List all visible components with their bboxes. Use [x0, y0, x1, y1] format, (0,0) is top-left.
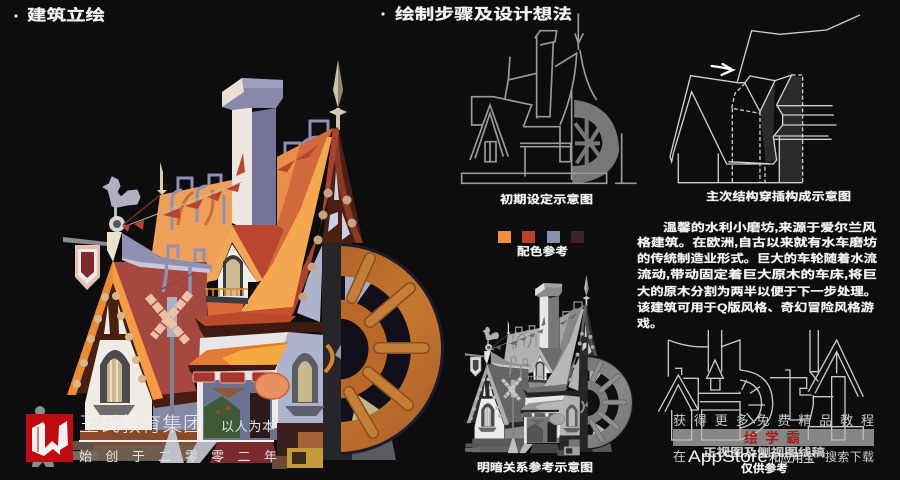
watermark: app promo [673, 413, 874, 466]
small spire [157, 162, 167, 195]
dark block beside the wheel [322, 243, 352, 460]
gear arm [325, 325, 358, 372]
rafter ledge [195, 318, 325, 338]
motto: 以人为本 [221, 419, 275, 434]
watermark: app promo: 和应用宝 [769, 450, 815, 465]
logo: red square [26, 414, 73, 462]
caption: colour reference: 配色参考 [517, 244, 568, 258]
windmill blades [148, 293, 190, 342]
hanging banner [63, 237, 107, 290]
water wheel [232, 243, 444, 455]
sketch wheel [573, 101, 618, 183]
bunting [122, 145, 318, 232]
right roof band [285, 128, 339, 315]
watermark: app promo: 搜索下载 [825, 449, 874, 464]
description paragraph: 戏。 [637, 316, 663, 330]
caption: elevation references: 正视图及侧视图线稿 [703, 445, 825, 459]
description paragraph: 格建筑。在欧洲,自古以来就有水车磨坊 [637, 235, 877, 249]
company name: 王氏教育集团 [79, 413, 203, 436]
shop plaques [193, 372, 273, 383]
divider [79, 440, 274, 442]
stone base and crates [272, 423, 323, 469]
description paragraph [637, 220, 877, 330]
description paragraph: 温馨的水利小磨坊,来源于爱尔兰风 [663, 220, 876, 234]
upper back roof [152, 180, 232, 284]
wall under red roof [153, 393, 197, 430]
caption: structure layers: 主次结构穿插构成示意图 [706, 189, 851, 203]
purlin band [107, 232, 212, 294]
right window [285, 353, 325, 416]
description paragraph: 的传统制造业形式。巨大的车轮随着水流 [637, 251, 877, 265]
awning [188, 342, 288, 372]
description paragraph: 大的原木分割为两半以便于下一步处理。 [637, 284, 877, 298]
balcony [205, 288, 248, 323]
spire [329, 60, 347, 130]
windmill pole [160, 297, 184, 463]
caption: elevation references: 仅供参考 [741, 461, 788, 475]
dormer [207, 225, 263, 298]
arrow [712, 64, 733, 75]
description paragraph: 该建筑可用于Q版风格、奇幻冒险风格游 [637, 300, 874, 314]
upper roof shadow marks [178, 190, 213, 225]
roof pegs [298, 188, 356, 302]
upper wall crenels [168, 246, 204, 262]
colour swatches [498, 231, 584, 243]
side wall under roof [297, 243, 323, 322]
back crenels [178, 121, 328, 196]
small figure behind logo [32, 406, 54, 467]
heading: building illustration: 建筑立绘 [27, 6, 105, 24]
illustration: water mill building [63, 60, 444, 469]
watermark: app promo: 获得更多免费精品教程 [673, 413, 874, 428]
central gable [232, 225, 284, 282]
watermark: app promo: 绘学霸 [744, 430, 800, 446]
value study: grayscale building [465, 275, 633, 456]
vane rooster [103, 177, 140, 232]
chimney [222, 78, 283, 232]
left gable [67, 260, 163, 430]
weather vane arm [160, 272, 196, 290]
diagram: structure layers [670, 15, 860, 183]
caption: initial design: 初期设定示意图 [500, 192, 593, 206]
caption: elevation references [703, 445, 825, 475]
heading: building illustration [14, 6, 105, 24]
main rear roof [235, 128, 333, 282]
shaded panels [760, 75, 803, 183]
logo block: company [26, 413, 277, 464]
left window [93, 350, 135, 415]
oval shop sign [255, 373, 289, 399]
sketch: initial design [462, 13, 637, 183]
caption: value study: 明暗关系参考示意图 [477, 460, 593, 474]
heading: drawing steps and design ideas: 绘制步骤及设计想法 [395, 5, 572, 23]
lower base and logs [63, 430, 197, 461]
diagram: elevations [658, 330, 863, 440]
watermark: app promo: AppStore [688, 447, 768, 466]
front house [197, 332, 323, 442]
watermark: app promo: 在 [673, 449, 686, 464]
heading: drawing steps and design ideas [381, 5, 572, 23]
description paragraph: 流动,带动固定着巨大原木的车床,将巨 [637, 267, 877, 281]
entry steps [186, 442, 278, 463]
back gable timber [322, 127, 363, 243]
main red roof [113, 262, 207, 400]
founding line: 始创于二零零二年 [79, 449, 277, 464]
